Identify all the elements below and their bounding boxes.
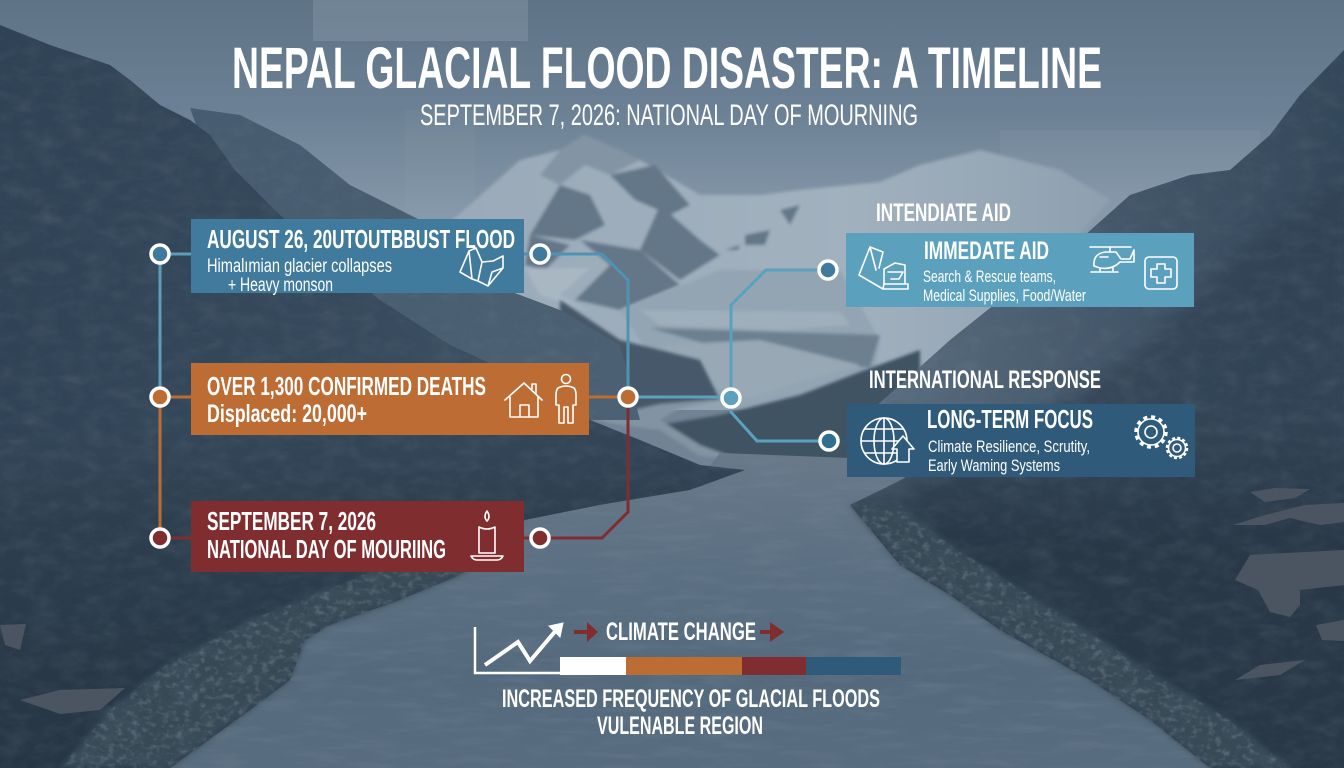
panel: confirmed deaths: OVER 1,300 CONFIRMED DEATHS (207, 371, 486, 401)
chart: climate change trend (475, 618, 901, 675)
panel: long-term focus (847, 404, 1195, 477)
panel: immediate aid: IMMEDATE AID (924, 237, 1049, 265)
subtitle: SEPTEMBER 7, 2026: NATIONAL DAY OF MOURNING (420, 99, 918, 132)
icon: medical cross (1145, 257, 1177, 289)
panel: August 26 outburst flood: + Heavy monson (228, 275, 333, 296)
left mountain: far ridge (190, 108, 640, 420)
panel: long-term focus: Early Waming Systems (928, 456, 1060, 475)
rocky river banks (60, 505, 1290, 768)
left foreground hill (0, 420, 745, 768)
panel: national day of mourning: NATIONAL DAY OF MOURIING (207, 534, 446, 564)
arrow: left (574, 622, 598, 642)
icon: helicopter (1090, 247, 1134, 272)
arrow: right (760, 622, 784, 642)
glacier valley (620, 270, 880, 420)
panel: August 26 outburst flood (191, 219, 524, 296)
panel: long-term focus: Climate Resilience, Scrutity, (928, 437, 1090, 456)
stacked bar (560, 657, 901, 675)
left mountain: near ridge (0, 25, 590, 480)
text: increased frequency: INCREASED FREQUENCY OF GLACIAL FLOODS (502, 685, 880, 713)
icon: glacier (460, 248, 503, 286)
icon: candle (471, 511, 503, 560)
panel: immediate aid: Medical Supplies, Food/Water (923, 286, 1086, 305)
icon: trend arrow (475, 623, 563, 673)
river channel behind hills (580, 410, 860, 470)
icon: person (556, 374, 576, 423)
timeline nodes (151, 245, 838, 547)
connector lines (160, 254, 847, 538)
heading: immediate aid: INTENDIATE AID (876, 199, 1011, 227)
panel: confirmed deaths: Displaced: 20,000+ (207, 400, 367, 428)
panel: immediate aid (846, 233, 1194, 307)
right foreground slope (850, 420, 1344, 768)
heading: international response: INTERNATIONAL RESPONSE (869, 366, 1101, 394)
panel: August 26 outburst flood: AUGUST 26, 20UTOUTBBUST FLOOD (207, 224, 515, 254)
noise patches (0, 488, 1344, 714)
icon: gears (1136, 417, 1187, 458)
panel: August 26 outburst flood: Himalımian glacier collapses (207, 256, 392, 277)
icon: relief supplies (859, 247, 908, 289)
faint background panels (313, 0, 1260, 370)
distant snowy range (440, 135, 1110, 390)
panel: confirmed deaths (191, 363, 589, 435)
panel: national day of mourning (191, 501, 524, 572)
panel: long-term focus: LONG-TERM FOCUS (927, 404, 1093, 434)
icon: globe with arrow (861, 418, 914, 464)
icon: house (505, 383, 542, 417)
panel: national day of mourning: SEPTEMBER 7, 2026 (207, 506, 376, 536)
panel: immediate aid: Search & Rescue teams, (923, 267, 1056, 286)
river (170, 453, 1210, 768)
label: climate change: CLIMATE CHANGE (606, 618, 756, 646)
right mountain (850, 50, 1344, 768)
text: vulnerable region: VULENABLE REGION (597, 712, 763, 740)
mid hills behind river (560, 300, 920, 500)
